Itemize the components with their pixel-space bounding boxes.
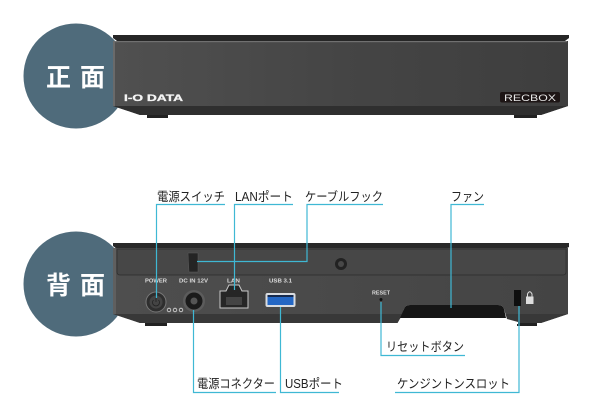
reset button: RESET (372, 290, 390, 296)
callout: fan (451, 190, 484, 308)
USB port: USB 3.1 (269, 278, 292, 284)
callout: Kensington slot: ケンジントンスロット (397, 377, 510, 391)
badge: rear view: 背 (46, 272, 71, 300)
badge: front view (24, 24, 128, 128)
badge: rear view: 面 (80, 272, 105, 300)
badge: front view: 正 (46, 64, 71, 92)
logo: RECBOX (500, 92, 560, 103)
callout: Kensington slot (395, 306, 519, 392)
rear lid (113, 243, 569, 249)
DC power jack: DC IN 12V (179, 278, 209, 284)
front lid (113, 35, 569, 41)
callout: cable hook (197, 189, 383, 262)
LAN port (220, 278, 248, 308)
LAN port: LAN (227, 278, 240, 284)
callout: reset button (381, 302, 465, 356)
USB port (266, 278, 296, 307)
reset button (372, 290, 390, 301)
DC polarity symbol (167, 308, 183, 312)
callout: power connector: 電源コネクター (197, 377, 275, 391)
badge: rear view (24, 232, 128, 336)
power switch (145, 278, 167, 312)
callout: cable hook: ケーブルフック (305, 189, 383, 204)
front body (113, 41, 568, 115)
callout: power switch (156, 190, 225, 298)
device: front view (113, 35, 569, 118)
callout: LAN port: LANポート (235, 190, 293, 204)
cable hook (188, 253, 198, 272)
callout: USB port: USBポート (285, 377, 343, 391)
DC power jack (179, 278, 209, 312)
screw (335, 258, 347, 270)
callout: reset button: リセットボタン (386, 340, 464, 354)
logo: I-O DATA: I-O DATA (124, 93, 183, 104)
rear recessed panel (117, 249, 566, 275)
callout: LAN port (234, 190, 293, 290)
device: rear view (113, 243, 569, 326)
callout: fan: ファン (451, 190, 484, 204)
fan vent notch (397, 305, 518, 324)
badge: front view: 面 (80, 64, 105, 92)
rear body (113, 248, 568, 323)
logo: RECBOX: RECBOX (504, 93, 556, 103)
power switch: POWER (145, 278, 167, 284)
callout: USB port (280, 307, 343, 392)
Kensington slot (514, 290, 534, 306)
callout: power connector (194, 310, 276, 392)
callout: power switch: 電源スイッチ (157, 190, 225, 204)
